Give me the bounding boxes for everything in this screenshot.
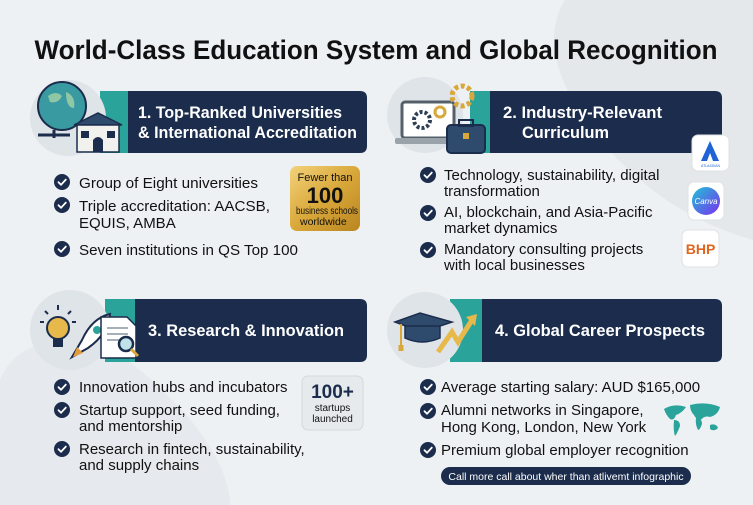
bullets 3: and supply chains: [79, 457, 199, 474]
panel: top-ranked universities: [30, 80, 367, 259]
bullets 1: Seven institutions in QS Top 100: [79, 242, 298, 259]
title: World-Class Education System and Global Recognition: [34, 35, 718, 65]
icon: bulb, rocket, document: [30, 290, 138, 370]
logo: canva: [688, 182, 724, 220]
bullets 2: AI, blockchain, and Asia-Pacific: [444, 204, 653, 221]
bullets 1: Triple accreditation: AACSB,: [79, 198, 270, 215]
bullets 4: Alumni networks in Singapore,: [441, 402, 644, 419]
bullets 4: Premium global employer recognition: [441, 442, 689, 459]
header bar 2: Curriculum: [522, 123, 609, 142]
header bar 1: & International Accreditation: [138, 123, 357, 142]
panel: research and innovation: [30, 290, 367, 474]
header bar 2: [470, 91, 722, 153]
bullets 3: Startup support, seed funding,: [79, 402, 280, 419]
badge: fewer than 100: 100: [307, 183, 343, 208]
bullets 1: [54, 174, 298, 259]
header bar 1: [100, 91, 367, 153]
bullets 3: and mentorship: [79, 418, 182, 435]
badge: 100+ startups: 100+: [311, 382, 354, 403]
bullets 3: Research in fintech, sustainability,: [79, 441, 305, 458]
bullets 2: with local businesses: [443, 257, 585, 274]
panel: global career prospects: [387, 292, 722, 485]
header bar 3: [105, 299, 367, 362]
logo: canva: Canva: [694, 197, 718, 206]
icon: graduation cap and arrow: [387, 292, 477, 368]
logo: BHP: [682, 230, 719, 267]
bullets 2: Technology, sustainability, digital: [444, 167, 659, 184]
badge: 100+ startups: [302, 376, 363, 430]
bullets 1: Group of Eight universities: [79, 175, 258, 192]
bullets 4: Average starting salary: AUD $165,000: [441, 379, 700, 396]
icon: world map: [664, 403, 720, 436]
logo: atlassian: ATLASSIAN: [701, 164, 720, 168]
callout pill: Call more call about wher than atlivemt infographic: [448, 471, 684, 483]
header bar 3: 3. Research & Innovation: [148, 321, 344, 340]
icon: laptop, gears, briefcase: [387, 77, 485, 153]
icon: globe and university: [30, 80, 122, 156]
bullets 2: [420, 167, 659, 274]
header bar 4: [450, 299, 722, 362]
bullets 2: market dynamics: [444, 220, 557, 237]
header bar 1: 1. Top-Ranked Universities: [138, 103, 342, 122]
badge: 100+ startups: startups: [315, 403, 350, 414]
badge: fewer than 100: Fewer than: [297, 172, 353, 184]
bullets 3: Innovation hubs and incubators: [79, 379, 287, 396]
bullets 4: [420, 379, 700, 459]
bullets 1: EQUIS, AMBA: [79, 215, 176, 232]
logo: atlassian: [692, 135, 729, 171]
header bar 2: 2. Industry-Relevant: [503, 103, 662, 122]
badge: fewer than 100: business schools: [296, 205, 358, 217]
badge: 100+ startups: launched: [312, 414, 353, 425]
callout pill: [441, 467, 691, 485]
bullets 2: transformation: [444, 183, 540, 200]
badge: fewer than 100: worldwide: [299, 216, 347, 228]
bullets 3: [54, 379, 305, 474]
panel: industry-relevant curriculum: [387, 77, 729, 274]
badge: fewer than 100: [290, 166, 360, 231]
bullets 4: Hong Kong, London, New York: [441, 419, 647, 436]
bullets 2: Mandatory consulting projects: [444, 241, 643, 258]
logo: BHP: BHP: [686, 241, 715, 257]
header bar 4: 4. Global Career Prospects: [495, 321, 705, 340]
